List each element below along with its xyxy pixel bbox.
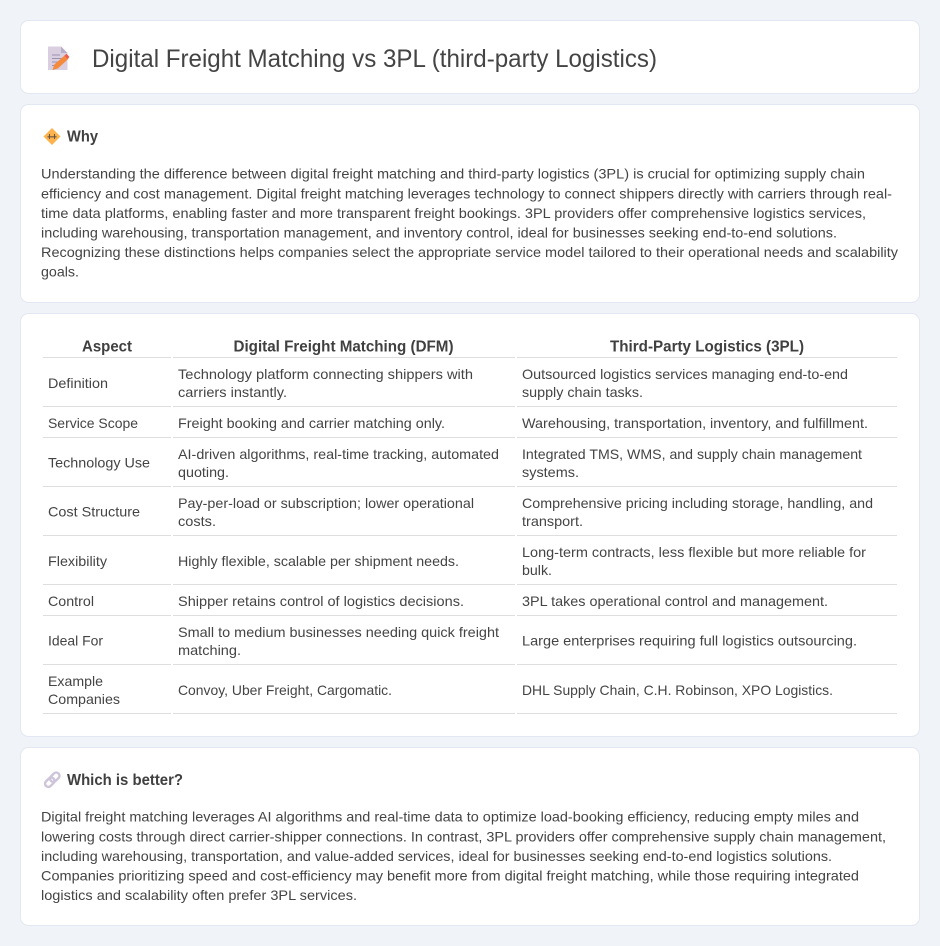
- row: cost structure: transport.: [522, 513, 583, 529]
- row: cost structure: Pay-per-load or subscription; lower operational: [178, 495, 474, 511]
- panel: comparison table: [20, 314, 920, 736]
- row: ideal for: Ideal For: [48, 632, 103, 648]
- row: cost structure: [48, 495, 873, 529]
- text block: which is better paragraph: Digital freight matching leverages AI algorithms and real-time data to optimize load-booking efficiency, reducing empty miles and: [41, 809, 859, 825]
- row: technology use: AI-driven algorithms, real-time tracking, automated: [178, 446, 499, 462]
- row: service scope: Freight booking and carrier matching only.: [178, 415, 445, 431]
- row: flexibility: Highly flexible, scalable per shipment needs.: [178, 553, 459, 569]
- text block: which is better paragraph: lowering costs through direct carrier-shipper connections. In contrast, 3PL providers offer comprehensive supply chain management,: [41, 828, 886, 844]
- title: Digital Freight Matching vs 3PL (third-party Logistics): [92, 45, 657, 73]
- text block: which is better paragraph: including warehousing, transportation, and value-added services, ideal for businesses seeking end-to-end logistics solutions.: [41, 848, 832, 864]
- row: ideal for: matching.: [178, 642, 241, 658]
- row: ideal for: Large enterprises requiring full logistics outsourcing.: [522, 632, 857, 648]
- icon: orange diamond: [44, 128, 60, 145]
- table header row: [82, 338, 804, 356]
- icon: chain link: [44, 771, 61, 788]
- row: cost structure: costs.: [178, 513, 216, 529]
- row: cost structure: Cost Structure: [48, 504, 140, 520]
- row: definition: Outsourced logistics services managing end-to-end: [522, 366, 848, 382]
- row: definition: [48, 366, 848, 400]
- panel: which is better: [20, 748, 920, 926]
- row: control: 3PL takes operational control and management.: [522, 593, 828, 609]
- text block: why paragraph: Recognizing these distinctions helps companies select the appropriate service model tailored to their operational needs and scalability: [41, 244, 898, 260]
- table header row: Aspect: [82, 338, 133, 356]
- row: example companies: Convoy, Uber Freight, Cargomatic.: [178, 682, 392, 698]
- heading: why: Why: [67, 128, 98, 146]
- text block: which is better paragraph: logistics and scalability often prefer 3PL services.: [41, 887, 357, 903]
- row: ideal for: Small to medium businesses needing quick freight: [178, 624, 499, 640]
- text block: why paragraph: [41, 166, 898, 280]
- row: ideal for: [48, 624, 857, 658]
- row: cost structure: Comprehensive pricing including storage, handling, and: [522, 495, 873, 511]
- text block: why paragraph: goals.: [41, 264, 79, 280]
- row: control: Control: [48, 593, 94, 609]
- row: control: Shipper retains control of logistics decisions.: [178, 593, 464, 609]
- text block: why paragraph: Understanding the difference between digital freight matching and third-party logistics (3PL) is crucial for optimizing supply chain: [41, 166, 865, 182]
- row: technology use: systems.: [522, 464, 579, 480]
- text block: which is better paragraph: [41, 809, 886, 903]
- row: control: [48, 593, 828, 609]
- row: technology use: Integrated TMS, WMS, and supply chain management: [522, 446, 862, 462]
- row: example companies: DHL Supply Chain, C.H. Robinson, XPO Logistics.: [522, 682, 833, 698]
- row: service scope: Service Scope: [48, 415, 138, 431]
- text block: why paragraph: time data platforms, enabling faster and more transparent freight bookings. 3PL providers offer comprehensive logistics services,: [41, 205, 866, 221]
- panel: title header: [20, 20, 920, 94]
- row: definition: Technology platform connecting shippers with: [178, 366, 473, 382]
- row: definition: Definition: [48, 375, 108, 391]
- text block: which is better paragraph: Companies prioritizing speed and cost-efficiency may benefit more from digital freight matching, while those requiring integrated: [41, 868, 859, 884]
- row: flexibility: Flexibility: [48, 553, 107, 569]
- heading: which is better: Which is better?: [67, 772, 183, 789]
- row: service scope: [48, 415, 868, 431]
- row: technology use: quoting.: [178, 464, 229, 480]
- table header row: Digital Freight Matching (DFM): [234, 338, 454, 356]
- panel: why: [20, 104, 920, 302]
- row: technology use: [48, 446, 862, 480]
- text block: why paragraph: efficiency and cost management. Digital freight matching leverages technology to connect shippers directly with carriers through real-: [41, 185, 892, 201]
- row: example companies: Companies: [48, 691, 120, 707]
- row: flexibility: bulk.: [522, 562, 552, 578]
- row: flexibility: Long-term contracts, less flexible but more reliable for: [522, 544, 866, 560]
- row: definition: carriers instantly.: [178, 384, 287, 400]
- icon: document with pencil: [48, 46, 69, 70]
- row: technology use: Technology Use: [48, 454, 150, 470]
- row: example companies: Example: [48, 673, 103, 689]
- row: service scope: Warehousing, transportation, inventory, and fulfillment.: [522, 415, 868, 431]
- row: flexibility: [48, 544, 866, 578]
- table header row: Third-Party Logistics (3PL): [610, 338, 804, 356]
- row: definition: supply chain tasks.: [522, 384, 643, 400]
- row: example companies: [48, 673, 833, 707]
- text block: why paragraph: including warehousing, transportation management, and inventory control, ideal for businesses seeking end-to-end solutions.: [41, 224, 837, 240]
